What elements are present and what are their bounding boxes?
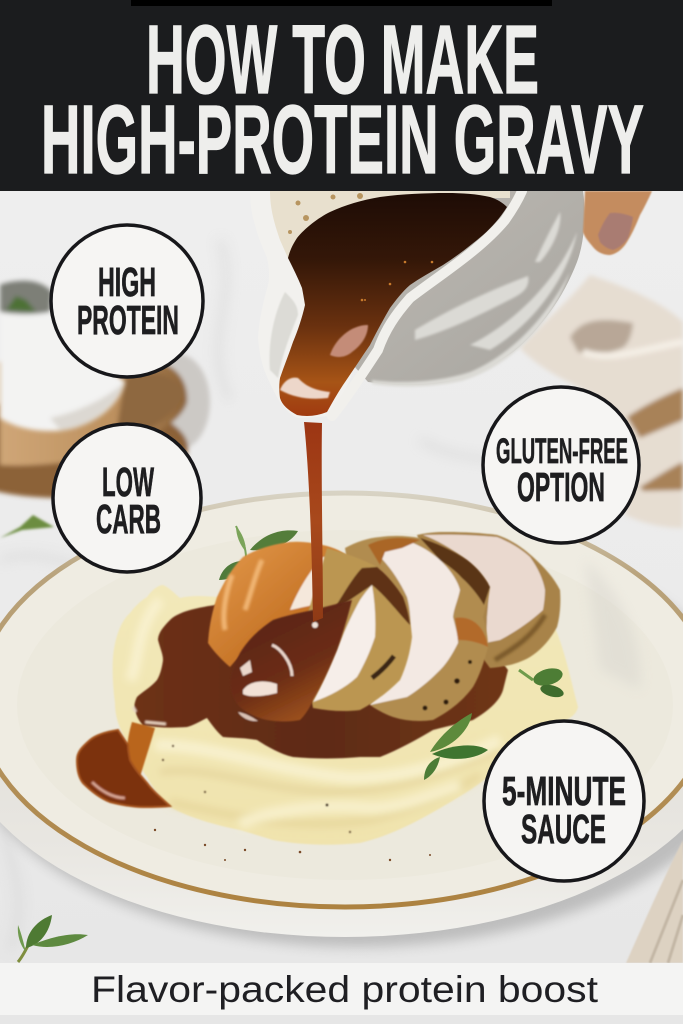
herb: basil sprig behind chicken [219, 526, 298, 580]
badge: gluten-free option: OPTION [517, 464, 605, 510]
footer band [0, 963, 683, 1015]
linen corner bottom right [626, 840, 683, 963]
title [41, 5, 644, 194]
tagline: Flavor-packed protein boost [91, 969, 599, 1010]
chicken slice: middle [345, 536, 490, 721]
right rim [332, 191, 522, 416]
badge: high protein [51, 225, 203, 377]
chicken slice: back right [417, 532, 560, 668]
fingertip holding boat [583, 191, 652, 255]
wooden board [0, 354, 210, 498]
badge: low carb: LOW [102, 459, 154, 505]
gravy boat [250, 191, 585, 418]
white cup with herbs [0, 279, 125, 431]
chicken slice: glazed left [208, 542, 352, 667]
gravy stream [304, 422, 323, 622]
chicken slice: front [300, 548, 412, 711]
badge: gluten-free option [483, 387, 639, 543]
badge: high protein: PROTEIN [77, 297, 179, 343]
header band [0, 0, 683, 194]
boat interior [270, 191, 510, 258]
badge: low carb [53, 424, 201, 572]
gravy pool on mash [77, 590, 508, 807]
mashed potato [113, 585, 578, 845]
herb: sprig lower left on table [18, 915, 88, 962]
herb: sprig bottom on mash [424, 713, 488, 780]
badge: high protein: HIGH [98, 259, 156, 305]
badge: 5-minute sauce: SAUCE [521, 806, 606, 852]
gravy in boat [279, 193, 507, 416]
boat body [340, 191, 585, 385]
badge: low carb: CARB [96, 496, 161, 542]
small herb sprig left [0, 515, 54, 538]
gravy blob on chicken [230, 600, 352, 722]
linen cloth [520, 275, 683, 528]
herb: sprig right on mash [519, 665, 565, 699]
spout white body [250, 191, 400, 418]
plate [0, 493, 683, 947]
boat highlights [372, 212, 577, 387]
badge: 5-minute sauce [484, 721, 644, 881]
